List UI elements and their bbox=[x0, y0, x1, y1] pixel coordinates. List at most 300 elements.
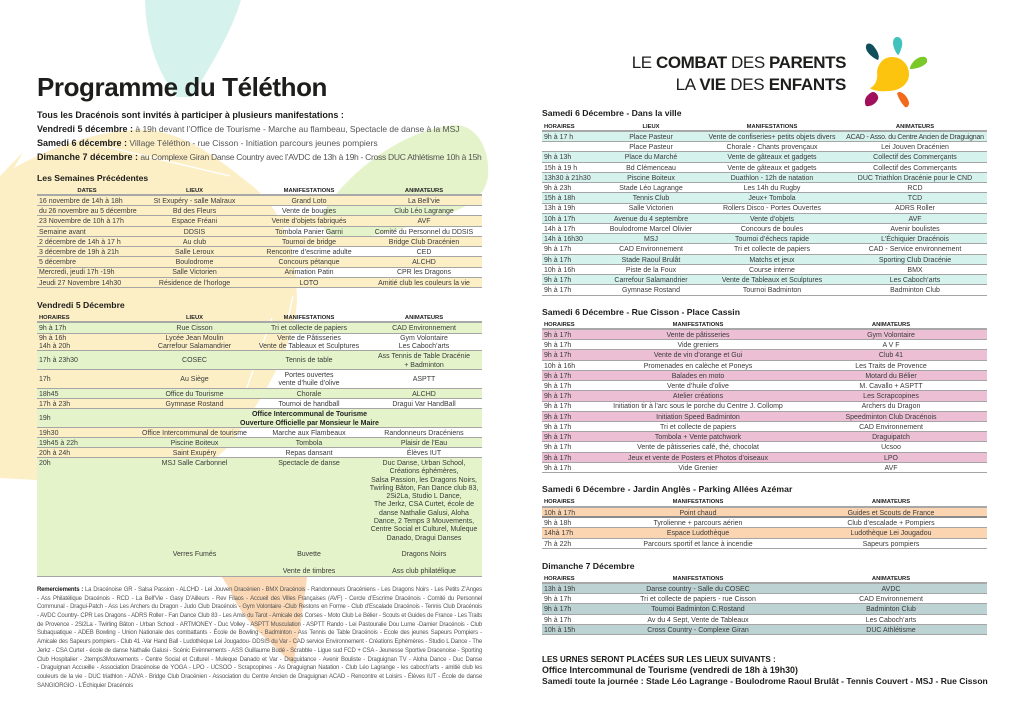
table rows: Point chaud bbox=[680, 510, 716, 516]
table rows: 14h à 20h bbox=[39, 343, 70, 350]
table rows: Les Scrapcopines bbox=[863, 393, 919, 400]
table header: LIEUX bbox=[186, 188, 203, 194]
table rows: Vente d’objets fabriqués bbox=[272, 218, 346, 225]
table rows: 13h à 19h bbox=[544, 205, 575, 212]
table rows: La Bell’vie bbox=[408, 198, 440, 205]
table rows: ALCHD bbox=[412, 391, 436, 398]
table rows: M. Cavallo + ASPTT bbox=[859, 383, 923, 390]
table rows: Espace Ludothèque bbox=[667, 530, 729, 537]
table rows: 18h45 bbox=[39, 391, 58, 398]
table header: MANIFESTATIONS bbox=[673, 499, 723, 505]
table rows: Créations éphémères, bbox=[390, 468, 458, 475]
table rows: Balades en moto bbox=[672, 373, 724, 380]
panel: samedi 6 décembre jardin anglès bbox=[542, 484, 987, 549]
table rows: Duc Danse, Urban School, bbox=[383, 460, 465, 467]
table rows: 9h à 17h bbox=[544, 444, 571, 451]
table rows: Sapeurs pompiers bbox=[863, 541, 919, 548]
table header: HORAIRES bbox=[544, 499, 575, 505]
remerciements text block: SANGIORGIO - L’Échiquier Dracénois bbox=[37, 683, 133, 689]
table rows: Semaine avant bbox=[39, 229, 86, 236]
table rows: Bridge Club Dracénien bbox=[389, 239, 459, 246]
table rows: Piscine Boiteux bbox=[171, 440, 218, 447]
table rows: Rencontre d’escrime adulte bbox=[266, 249, 352, 256]
table rows: 9h à 17 h bbox=[544, 134, 573, 141]
table rows: Collectif des Commerçants bbox=[873, 154, 957, 161]
remerciements text block: couleurs de la vie - DUC triathlon - ADVA - Bridge Club Dracénien - Association du Centre Ancien de Draguignan ACAD - Rencontre et Loisirs - Élèves IUT - École de danse bbox=[37, 674, 482, 680]
table rows: Place du Marché bbox=[625, 154, 677, 161]
table rows: TCD bbox=[908, 195, 922, 202]
table header: DATES bbox=[77, 188, 97, 194]
heading: Dimanche 7 Décembre bbox=[542, 561, 635, 571]
table rows: Club d’escalade + Pompiers bbox=[847, 520, 935, 527]
table rows: Rollers Disco - Portes Ouvertes bbox=[723, 205, 821, 212]
table rows: 20h bbox=[39, 460, 51, 467]
table rows: Les Caboch’arts bbox=[399, 343, 449, 350]
table rows: Concours de boules bbox=[741, 226, 803, 233]
table rows: Office du Tourisme bbox=[165, 391, 224, 398]
slogan line 1: LE COMBAT DES PARENTS bbox=[632, 53, 846, 72]
table rows: du 26 novembre au 5 décembre bbox=[39, 208, 137, 215]
table rows: Danse country - Salle du COSEC bbox=[646, 586, 750, 593]
table header bbox=[542, 120, 987, 132]
table rows: CED bbox=[417, 249, 431, 256]
table rows: Gymnase Rostand bbox=[166, 401, 223, 408]
orange background shape bbox=[215, 560, 310, 664]
table rows: Boulodrome bbox=[176, 259, 213, 266]
table rows: The Jerkz, CSA Curtet, école de bbox=[374, 501, 474, 508]
slogan bbox=[632, 53, 846, 94]
table rows: Place Pasteur bbox=[629, 144, 673, 151]
table rows: MSJ bbox=[644, 236, 658, 243]
table rows: MSJ Salle Carbonnel bbox=[162, 460, 227, 467]
table rows: Duathlon - 12h de natation bbox=[731, 175, 813, 182]
table rows: Tournoi de bridge bbox=[282, 239, 336, 246]
table rows: Tombola bbox=[296, 440, 322, 447]
table rows: RCD bbox=[907, 185, 923, 192]
table rows: Vide greniers bbox=[677, 342, 719, 349]
table rows: Grand Loto bbox=[291, 198, 327, 205]
table header: LIEUX bbox=[186, 315, 203, 321]
table rows: 10h à 17h bbox=[544, 216, 575, 223]
table rows: 9h à 17h bbox=[544, 257, 571, 264]
table rows: 9h à 17h bbox=[544, 434, 571, 441]
table rows: Bd des Fleurs bbox=[173, 208, 216, 215]
table rows: Lei Jouven Dracénien bbox=[881, 144, 949, 151]
table rows: BMX bbox=[907, 267, 923, 274]
heading: Les Semaines Précédentes bbox=[37, 173, 148, 183]
table rows: 16 novembre de 14h à 18h bbox=[39, 198, 123, 205]
table rows: Vente d’huile d’olive bbox=[667, 383, 729, 390]
intro text: Vendredi 5 décembre : à 19h devant l’Office de Tourisme - Marche au flambeau, Spectacle de danse à la MSJ bbox=[37, 124, 459, 134]
slogan line 2: LA VIE DES ENFANTS bbox=[676, 75, 846, 94]
table header: HORAIRES bbox=[544, 124, 575, 130]
table rows: 9h à 17h bbox=[544, 393, 571, 400]
table rows: Les Traits de Provence bbox=[855, 363, 927, 370]
table header bbox=[542, 495, 987, 508]
table rows: Badminton Club bbox=[866, 606, 916, 613]
table rows: Dance, 2 Temps 3 Mouvements, bbox=[374, 518, 474, 525]
panel: vendredi 5 décembre bbox=[37, 300, 482, 577]
table rows: Vente de vin d’orange et Gui bbox=[654, 352, 742, 359]
table rows: Carrefour Salamandrier bbox=[614, 277, 688, 284]
table rows: Spectacle de danse bbox=[278, 460, 340, 467]
table rows: 14hà 17h bbox=[544, 530, 573, 537]
table rows: 14h à 16h30 bbox=[544, 236, 583, 243]
table rows: Carrefour Salamandrier bbox=[158, 343, 231, 350]
icon: dark teal petal bbox=[866, 44, 879, 60]
table rows: Lycée Jean Moulin bbox=[165, 335, 224, 342]
table rows: Vente de Pâtisseries bbox=[277, 335, 341, 342]
table header: MANIFESTATIONS bbox=[284, 315, 334, 321]
remerciements text block: - Ass Philatélique Dracénois - RCD - La Bell’Vie - Gasy D’Ailleurs - Rev Filaos - Accueil des Villes Françaises (AVF) - Cercle d’Escrime Dracénois - Comité du Personnel bbox=[37, 596, 482, 602]
table rows: 9h à 17h bbox=[39, 325, 66, 332]
table rows: 9h à 17h bbox=[544, 606, 571, 613]
table rows: 5 décembre bbox=[39, 259, 76, 266]
table rows: Collectif des Commerçants bbox=[873, 165, 957, 172]
table rows: Av du 4 Sept, Vente de Tableaux bbox=[647, 617, 749, 624]
table rows: Office Intercommunal de Tourisme bbox=[252, 411, 367, 418]
table rows: 9h à 23h bbox=[544, 185, 571, 192]
table rows: CAD Environnement bbox=[392, 325, 456, 332]
table header: ANIMATEURS bbox=[405, 315, 443, 321]
table rows: Piscine Boiteux bbox=[627, 175, 675, 182]
table rows bbox=[542, 330, 987, 473]
table rows: Place Pasteur bbox=[629, 134, 673, 141]
teal background shape bbox=[145, 0, 241, 97]
table rows: Au club bbox=[183, 239, 206, 246]
table rows: Jeux+ Tombola bbox=[748, 195, 796, 202]
table rows: 10h à 16h bbox=[544, 363, 575, 370]
remerciements text block bbox=[37, 586, 482, 689]
table rows: CAD Environnement bbox=[859, 596, 923, 603]
intro text: Tous les Dracénois sont invités à participer à plusieurs manifestations : bbox=[37, 110, 344, 120]
table header: HORAIRES bbox=[544, 322, 575, 328]
table rows: Espace Fréani bbox=[172, 218, 217, 225]
table rows: Club Léo Lagrange bbox=[394, 208, 454, 215]
table rows bbox=[542, 508, 987, 549]
table rows: Rue Cisson bbox=[176, 325, 213, 332]
table rows: 10h à 16h bbox=[544, 267, 575, 274]
table rows: 15h à 19 h bbox=[544, 165, 577, 172]
table rows: Salsa Passion, les Dragons Noirs, bbox=[371, 477, 477, 484]
table rows: ACAD - Asso. du Centre Ancien de Draguignan bbox=[846, 134, 984, 141]
table header: MANIFESTATIONS bbox=[673, 322, 723, 328]
table header: MANIFESTATIONS bbox=[747, 124, 797, 130]
table rows: Tri et collecte de papiers - rue Cisson bbox=[640, 596, 756, 603]
table rows: Vente de Tableaux et Sculptures bbox=[722, 277, 822, 284]
table rows: Avenue du 4 septembre bbox=[614, 216, 688, 223]
heading: Samedi 6 Décembre - Rue Cisson - Place Cassin bbox=[542, 307, 740, 317]
table rows: ADRS Roller bbox=[895, 205, 935, 212]
icon: magenta petal bbox=[865, 92, 878, 106]
table rows: Promenades en calèche et Poneys bbox=[644, 363, 752, 370]
table rows: Ass Tennis de Table Dracénie bbox=[378, 353, 470, 360]
table rows: Avenir boulistes bbox=[890, 226, 940, 233]
table rows: Comité du Personnel du DDSIS bbox=[375, 229, 473, 236]
table header: ANIMATEURS bbox=[872, 576, 910, 582]
table rows: Randonneurs Dracéniens bbox=[384, 430, 464, 437]
table rows: CAD Environnement bbox=[619, 246, 683, 253]
table rows: Ucsoo bbox=[881, 444, 901, 451]
table rows: 17h bbox=[39, 376, 51, 383]
table rows: ASPTT bbox=[413, 376, 435, 383]
table rows: 9h à 17h bbox=[544, 332, 571, 339]
table rows bbox=[37, 323, 482, 577]
table rows: Jeux et vente de Posters et Photos d’oiseaux bbox=[628, 455, 768, 462]
table header bbox=[542, 318, 987, 330]
table rows: Vente d’objets bbox=[750, 216, 794, 223]
table rows: 9h à 16h bbox=[39, 335, 66, 342]
table rows: Centre Social et Culturel, Muleque bbox=[371, 526, 477, 533]
icon: orange petal bbox=[897, 92, 909, 107]
intro text: Dimanche 7 décembre : au Complexe Giran Danse Country avec l’AVDC de 13h à 19h - Cross DUC Athlétisme 10h à 15h bbox=[37, 152, 482, 162]
table rows: Les Caboch’arts bbox=[866, 617, 916, 624]
table rows: AVDC bbox=[882, 586, 900, 593]
table rows: 15h à 18h bbox=[544, 195, 575, 202]
table rows: Tri et collecte de papiers bbox=[734, 246, 810, 253]
table rows: Club 41 bbox=[879, 352, 903, 359]
table header: MANIFESTATIONS bbox=[673, 576, 723, 582]
table rows: Course interne bbox=[749, 267, 795, 274]
table rows: Repas dansant bbox=[285, 450, 333, 457]
table rows: Gym Volontaire bbox=[867, 332, 915, 339]
urnes text block: LES URNES SERONT PLACÉES SUR LES LIEUX SUIVANTS : bbox=[542, 655, 776, 664]
table header bbox=[542, 572, 987, 584]
table rows: 17h à 23h bbox=[39, 401, 70, 408]
table rows: Gym Volontaire bbox=[400, 335, 448, 342]
table header: HORAIRES bbox=[39, 315, 70, 321]
table header: ANIMATEURS bbox=[872, 499, 910, 505]
remerciements text block: Communal - Dragui-Patch - Ass Les Archers du Dragon - Judo Club Dracénois - Gym Volontaire -Club Restons en Forme - Club d’Escalade Dracénois - Tennis Club Dracénois bbox=[37, 604, 482, 610]
table header: MANIFESTATIONS bbox=[284, 188, 334, 194]
table header: ANIMATEURS bbox=[405, 188, 443, 194]
table rows: 7h à 22h bbox=[544, 541, 571, 548]
table rows: Chorale bbox=[297, 391, 321, 398]
table rows: Sporting Club Dracénie bbox=[879, 257, 951, 264]
intro text: Samedi 6 décembre : Village Téléthon - rue Cisson - Initiation parcours jeunes pompiers bbox=[37, 138, 378, 148]
table rows: Piste de la Foux bbox=[626, 267, 676, 274]
table rows: Tournoi d’échecs rapide bbox=[735, 236, 809, 243]
table rows: Vente de pâtisseries café, thé, chocolat bbox=[637, 444, 759, 451]
table rows: 9h à 17h bbox=[544, 287, 571, 294]
table rows: Élèves IUT bbox=[407, 450, 441, 457]
table rows: Tombola + Vente patchwork bbox=[655, 434, 741, 441]
urnes text block: Samedi toute la journée : Stade Léo Lagrange - Boulodrome Raoul Brulât - Tennis Couvert - MSJ - Rue Cisson bbox=[542, 676, 988, 686]
table rows: Speedminton Club Dracénois bbox=[845, 414, 937, 421]
table rows: Tri et collecte de papiers bbox=[660, 424, 736, 431]
urnes text block bbox=[542, 654, 988, 686]
table rows: 3 décembre de 19h à 21h bbox=[39, 249, 119, 256]
table rows: 9h à 17h bbox=[544, 373, 571, 380]
table rows: 23 Novembre de 10h à 17h bbox=[39, 218, 124, 225]
table rows: Tombola Panier Garni bbox=[275, 229, 343, 236]
table rows: Vente de timbres bbox=[283, 568, 335, 575]
table rows: 14h à 17h bbox=[544, 226, 575, 233]
table header: ANIMATEURS bbox=[896, 124, 934, 130]
table rows: Boulodrome Marcel Olivier bbox=[610, 226, 692, 233]
table rows: Salle Victorien bbox=[629, 205, 673, 212]
table rows: Guides et Scouts de France bbox=[848, 510, 934, 516]
table header bbox=[37, 184, 482, 196]
table rows: Dragons Noirs bbox=[402, 551, 446, 558]
table rows: 19h bbox=[39, 415, 51, 422]
table rows: 9h à 17h bbox=[544, 414, 571, 421]
table rows: 9h à 17h bbox=[544, 352, 571, 359]
table rows bbox=[37, 196, 482, 288]
table rows: Twirling Bâton, Fan Dance club 83, bbox=[370, 485, 478, 492]
table rows: Les Caboch’arts bbox=[890, 277, 940, 284]
table rows: Archers du Dragon bbox=[862, 403, 920, 410]
table rows: 9h à 17h bbox=[544, 617, 571, 624]
table rows: Parcours sportif et lance à incendie bbox=[643, 541, 753, 548]
heading: Samedi 6 Décembre - Dans la ville bbox=[542, 108, 682, 118]
table rows: AVF bbox=[884, 465, 898, 472]
table rows: CPR les Dragons bbox=[397, 269, 451, 276]
table rows: DDSIS bbox=[184, 229, 205, 236]
urnes text block: Office Intercommunal de Tourisme (vendredi de 18h à 19h30) bbox=[542, 665, 798, 675]
table rows: Buvette bbox=[297, 551, 321, 558]
table rows: Tournoi Badminton C.Rostand bbox=[651, 606, 745, 613]
remerciements text block: Jerkz - CSA Curtet - école de danse Nathalie Galusi - Scénic Evènnements - ASS Guillaume Budé - Scrabble - Ligue sud FCD + CSA - Jeunesse Sportive Dracenoise - Sporting bbox=[37, 648, 482, 654]
table rows: 9h à 17h bbox=[544, 383, 571, 390]
table rows: Stade Léo Lagrange bbox=[619, 185, 683, 192]
table rows: 9h à 17h bbox=[544, 596, 571, 603]
table rows: CAD Environnement bbox=[859, 424, 923, 431]
table rows: 10h à 17h bbox=[544, 510, 575, 516]
icon: green petal bbox=[910, 57, 927, 69]
table rows: Tennis de table bbox=[285, 357, 333, 364]
table rows: 19h30 bbox=[39, 430, 58, 437]
table rows: Tournoi Badminton bbox=[743, 287, 801, 294]
table rows: Chorale - Chants provençaux bbox=[726, 144, 818, 151]
table rows: Vente de bougies bbox=[282, 208, 336, 215]
panel: les semaines précédentes bbox=[37, 173, 482, 288]
table rows: 9h à 17h bbox=[544, 424, 571, 431]
logo: sun with petals bbox=[864, 37, 928, 108]
table rows: Vide Grenier bbox=[678, 465, 718, 472]
table rows: 19h45 à 22h bbox=[39, 440, 78, 447]
heading: Samedi 6 Décembre - Jardin Anglès - Parking Allées Azémar bbox=[542, 484, 792, 494]
table rows: CAD - Service environnement bbox=[869, 246, 961, 253]
panel: dimanche 7 décembre bbox=[542, 561, 987, 635]
table rows: Salle Leroux bbox=[175, 249, 214, 256]
table header bbox=[37, 311, 482, 323]
table rows: Vente de gâteaux et gadgets bbox=[727, 154, 817, 161]
table rows: 9h à 18h bbox=[544, 520, 571, 527]
table rows: 13h à 19h bbox=[544, 586, 575, 593]
table rows: L’Échiquier Dracénois bbox=[881, 236, 949, 243]
table rows: Au Siège bbox=[180, 376, 209, 383]
intro text bbox=[37, 110, 482, 162]
table rows: LPO bbox=[884, 455, 898, 462]
table rows: DUC Triathlon Dracénie pour le CND bbox=[858, 175, 972, 182]
table rows: 9h à 17h bbox=[544, 455, 571, 462]
table rows: Tri et collecte de papiers bbox=[271, 325, 347, 332]
remerciements text block: Amicale des Sapeurs pompiers - Club 41 -Var Hand Ball - Ludothèque Lei Jougadou- DDSIS du Var - CAD service Environnement - Créations Ephémères - Studio L Dance - The bbox=[37, 639, 482, 645]
table rows: AVF bbox=[417, 218, 431, 225]
table rows: Ludothèque Lei Jougadou bbox=[851, 530, 931, 537]
table rows: danse Nathalie Galusi, Aloha bbox=[379, 510, 469, 517]
table rows: Concours pétanque bbox=[278, 259, 340, 266]
table rows: 17h à 23h30 bbox=[39, 357, 78, 364]
table rows: Plaisir de l’Eau bbox=[401, 440, 447, 447]
table header: LIEUX bbox=[642, 124, 660, 130]
remerciements text block: Club Hospitalier - 2temps3Mouvements - Centre Social et Culturel - Muleque Danado et Var - Draguidance - Avenir Bouliste - Draguignan TV - Aloha Dance - Duc Danse bbox=[37, 656, 482, 662]
remerciements text block: Subaquatique - ADEB Bowling - Union Nationale des combattants - École de Bowling - Badminton - Ass Tennis de Table Dracénois - Ecole des jeunes Sapeurs Pompiers - bbox=[37, 630, 482, 636]
table rows: Danado, Dragui Danses bbox=[387, 535, 461, 542]
yellow brush background shape bbox=[0, 130, 297, 480]
heading: Vendredi 5 Décembre bbox=[37, 300, 125, 310]
table header: HORAIRES bbox=[544, 576, 575, 582]
table rows: 2 décembre de 14h à 17 h bbox=[39, 239, 121, 246]
table rows: Stade Raoul Brulât bbox=[622, 257, 680, 264]
table rows: A V F bbox=[882, 342, 900, 349]
table rows: 9h à 17h bbox=[544, 403, 571, 410]
table rows: Dragui Var HandBall bbox=[392, 401, 456, 408]
table rows: + Badminton bbox=[404, 362, 444, 368]
table rows: Initiation tir à l’arc sous le porche du Centre J. Collomp bbox=[613, 403, 783, 410]
table rows: Saint Exupéry bbox=[173, 450, 216, 457]
table rows: Atelier créations bbox=[673, 393, 723, 400]
remerciements text block: - AVDC Country- CPR Les Dragons - ADRS Roller - Fan Dance Club 83 - Les Amis du Tarot - Amicale des Corses - Moto Club Le Bélier - Scouts et Guides de France - Les Traits bbox=[37, 613, 482, 619]
table rows: Les 14h du Rugby bbox=[744, 185, 800, 192]
table rows: Tennis Club bbox=[633, 195, 669, 202]
table rows: Verres Fumés bbox=[173, 551, 216, 558]
panel: samedi 6 décembre rue cisson bbox=[542, 307, 987, 473]
table rows: 20h à 24h bbox=[39, 450, 70, 457]
table rows: ALCHD bbox=[412, 259, 436, 266]
table rows: Bd Clémenceau bbox=[626, 165, 676, 172]
title: Programme du Téléthon bbox=[37, 72, 327, 102]
table rows: Office Intercommunal de tourisme bbox=[142, 430, 247, 437]
table rows: 9h à 13h bbox=[544, 154, 571, 161]
table rows: Mercredi, jeudi 17h -19h bbox=[39, 269, 114, 276]
table rows: 13h30 à 21h30 bbox=[544, 175, 591, 182]
table rows: 2Si2La, Studio L Dance, bbox=[386, 493, 462, 500]
icon: teal petal bbox=[893, 37, 902, 55]
table rows: 9h à 17h bbox=[544, 342, 571, 349]
table rows: LOTO bbox=[300, 280, 318, 287]
table rows: Jeudi 27 Novembre 14h30 bbox=[39, 280, 121, 287]
table rows: AVF bbox=[908, 216, 922, 223]
table rows: Draguipatch bbox=[872, 434, 910, 441]
table rows: Vente de Tableaux et Sculptures bbox=[259, 343, 359, 350]
table rows: Ouverture Officielle par Monsieur le Maire bbox=[240, 420, 379, 426]
table rows bbox=[542, 132, 987, 296]
table rows: Ass club philatélique bbox=[392, 568, 456, 575]
table rows: vente d’huile d’olive bbox=[278, 380, 340, 387]
table rows: Gymnase Rostand bbox=[622, 287, 680, 294]
table rows: COSEC bbox=[182, 357, 207, 364]
table rows: Cross Country - Complexe Giran bbox=[647, 627, 749, 634]
table rows: Amitié club les couleurs la vie bbox=[378, 280, 470, 287]
table rows: Vente de pâtisseries bbox=[666, 332, 730, 339]
table rows: Marche aux Flambeaux bbox=[272, 430, 346, 437]
table rows: Vente de gâteaux et gadgets bbox=[727, 165, 817, 172]
table rows: 9h à 17h bbox=[544, 246, 571, 253]
table header: ANIMATEURS bbox=[872, 322, 910, 328]
table rows: Initiation Speed Badminton bbox=[656, 414, 740, 421]
table rows: Portes ouvertes bbox=[284, 372, 334, 379]
table rows: Vente de confiseries+ petits objets divers bbox=[708, 134, 836, 141]
icon: sun body bbox=[870, 57, 909, 91]
remerciements text block: - Draguignan Accueille - Association Dracénoise de YOGA - LPO - UCSOO - Scrapcopines - As Draguignan Natation - Club Léo Lagrange - les caboch’arts - amitié club les bbox=[37, 665, 482, 671]
remerciements text block: de Provence - 2Si2La - Twirling Bâton - Urban School - ARTMONEY - Duc Volley - ASPTT Musculation - ASPTT Rando - Lei Pastouralie Dou Lume -Damier Dracénois - Club bbox=[37, 622, 482, 628]
green background shape bbox=[322, 125, 488, 240]
table rows: Résidence de l’horloge bbox=[159, 280, 230, 287]
table rows: St Exupéry - salle Malraux bbox=[154, 198, 235, 205]
table rows: DUC Athlétisme bbox=[866, 627, 916, 634]
